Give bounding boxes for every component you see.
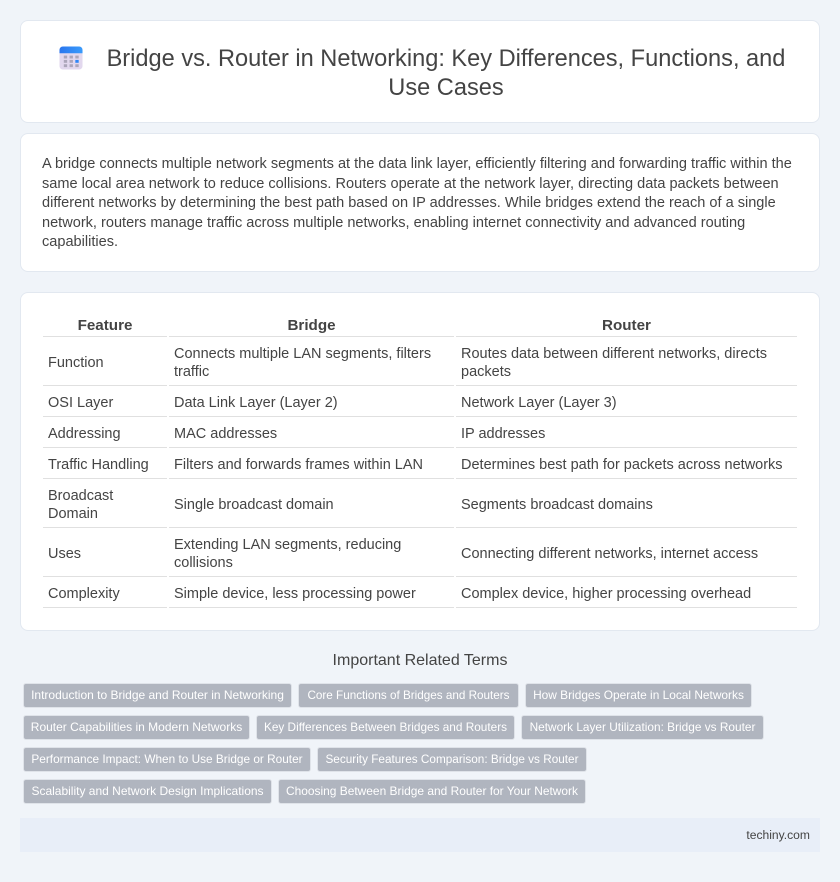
tag (298, 683, 519, 708)
comparison table (43, 317, 797, 608)
tag (256, 715, 515, 740)
tag: Performance Impact: When to Use Bridge or Router (31, 752, 303, 766)
related term tags (23, 683, 764, 804)
footer (20, 818, 820, 852)
row: Function: Function (48, 355, 104, 371)
comparison table: Connects multiple LAN segments, filters (174, 346, 431, 362)
panel: comparison table (20, 292, 820, 631)
title (107, 46, 785, 101)
comparison table: Bridge (287, 317, 336, 334)
table header: Feature (78, 317, 132, 334)
icon: calendar (59, 46, 83, 70)
comparison table: Determines best path for packets across networks (461, 457, 783, 473)
tag: Security Features Comparison: Bridge vs Router (325, 753, 579, 766)
tag: Scalability and Network Design Implications (31, 784, 264, 798)
footer site name: techiny.com (746, 828, 810, 842)
tag: Network Layer Utilization: Bridge vs Router (530, 720, 755, 734)
intro text: A bridge connects multiple network segments at the data link layer, efficiently filtering and forwarding traffic within the (42, 156, 792, 172)
comparison table: Segments broadcast domains (461, 497, 653, 513)
title: Bridge vs. Router in Networking: Key Differences, Functions, and (107, 46, 785, 72)
intro text (42, 156, 792, 250)
comparison table: Extending LAN segments, reducing (174, 537, 401, 553)
tag (317, 747, 587, 772)
row: Broadcast Domain (48, 488, 114, 522)
intro text: same local area network to reduce collisions. Routers operate at the network layer, directing data packets between (42, 176, 779, 192)
tag (23, 683, 292, 708)
tag: Introduction to Bridge and Router in Networking (31, 688, 284, 702)
row: Addressing: Addressing (48, 426, 121, 442)
panel: header (20, 20, 820, 123)
row: OSI Layer: OSI Layer (48, 395, 113, 411)
tag: Router Capabilities in Modern Networks (31, 720, 242, 734)
comparison table: Connecting different networks, internet access (461, 546, 758, 562)
intro text: capabilities. (42, 234, 118, 250)
comparison table: Data Link Layer (Layer 2) (174, 395, 338, 411)
comparison table: collisions (174, 555, 233, 571)
row: Broadcast Domain: Domain (48, 506, 98, 522)
intro text: network, routers manage traffic across multiple networks, enabling internet connectivity and advanced routing (42, 214, 745, 230)
row: Traffic Handling: Traffic Handling (48, 457, 149, 473)
row: Uses: Uses (48, 546, 81, 562)
row: Broadcast Domain: Broadcast (48, 488, 113, 504)
comparison table: Router (602, 317, 651, 334)
tag: How Bridges Operate in Local Networks (533, 688, 744, 702)
tag: Core Functions of Bridges and Routers (307, 689, 510, 702)
tag (521, 715, 764, 740)
tag: Key Differences Between Bridges and Routers (264, 720, 507, 734)
tag (23, 747, 311, 772)
comparison table: Routes data between different networks, directs (461, 346, 767, 362)
row: Complexity: Complexity (48, 586, 120, 602)
tag (23, 715, 250, 740)
comparison table: IP addresses (461, 426, 545, 442)
tag (525, 683, 752, 708)
tag: Choosing Between Bridge and Router for Your Network (286, 784, 578, 798)
comparison table: Filters and forwards frames within LAN (174, 457, 423, 473)
comparison table: Simple device, less processing power (174, 586, 416, 602)
panel: introduction (20, 133, 820, 272)
tag (23, 779, 272, 804)
comparison table: Complex device, higher processing overhead (461, 586, 751, 602)
comparison table: traffic (174, 364, 209, 380)
title: Use Cases (388, 75, 504, 101)
comparison table: Network Layer (Layer 3) (461, 395, 617, 411)
comparison table: Single broadcast domain (174, 497, 334, 513)
comparison table: packets (461, 364, 511, 380)
tag (278, 779, 586, 804)
heading: related terms: Important Related Terms (333, 652, 507, 669)
comparison table: MAC addresses (174, 426, 277, 442)
intro text: different networks by determining the best path based on IP addresses. While bridges extend the reach of a single (42, 195, 776, 211)
